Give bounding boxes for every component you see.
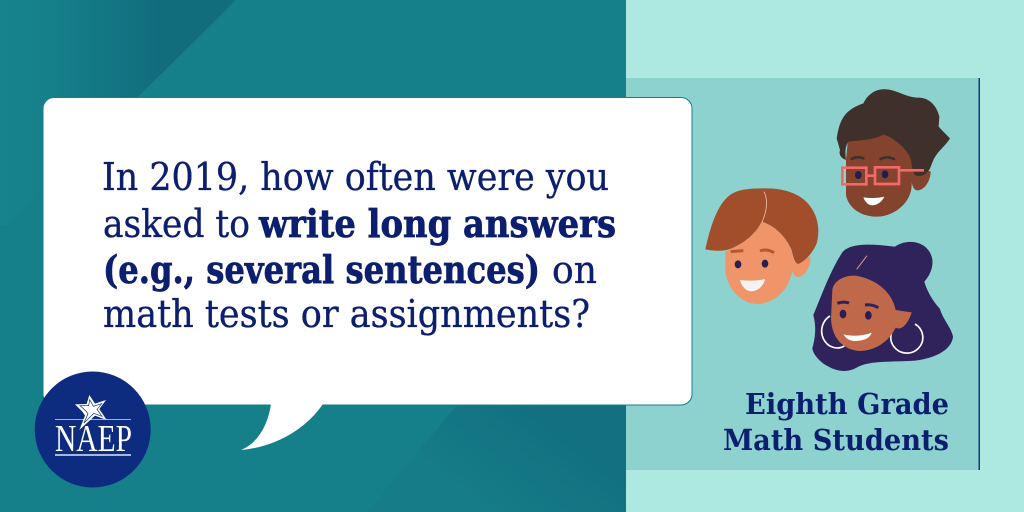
question text: on <box>552 248 597 292</box>
face: student with glasses <box>837 89 950 217</box>
question text <box>102 155 616 336</box>
face: student with hoop earrings <box>812 242 953 371</box>
NAEP logo <box>35 372 151 488</box>
question text: math tests or assignments? <box>103 292 590 336</box>
NAEP logo: NAEP <box>55 418 132 460</box>
face: student with auburn hair <box>705 188 818 304</box>
question text: (e.g., several sentences) <box>103 247 540 292</box>
question text: asked to <box>103 202 250 246</box>
panel: light aqua column <box>626 0 1024 512</box>
illustration: student faces <box>705 89 953 371</box>
background shape: top-left dark wedge <box>0 0 236 225</box>
background shape: bottom-right dark wedge <box>367 405 626 512</box>
question text: In 2019, how often were you <box>102 155 609 199</box>
panel: teal background <box>0 0 626 512</box>
speech bubble <box>43 98 692 450</box>
question text: write long answers <box>258 201 616 246</box>
caption: eighth grade math students: Eighth Grade <box>745 387 949 421</box>
card right edge line <box>978 78 980 470</box>
caption: eighth grade math students <box>723 387 949 457</box>
caption: eighth grade math students: Math Students <box>723 423 949 457</box>
panel: students card <box>626 78 979 470</box>
